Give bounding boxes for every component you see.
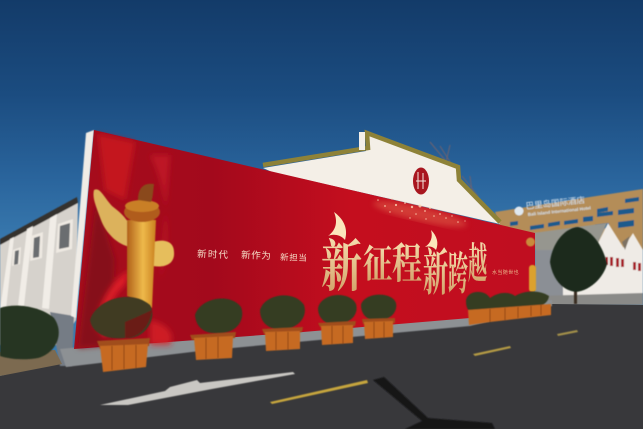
flames (328, 212, 346, 240)
beast (138, 184, 154, 202)
small gold emblem and figure (526, 238, 536, 292)
gold sparkle cloud (372, 196, 468, 232)
headline: 程 (392, 240, 422, 287)
white wall edge (71, 130, 94, 318)
shaft (127, 220, 156, 308)
curtain drapes (78, 134, 172, 348)
planter: second (190, 298, 242, 360)
shadow on road (373, 377, 495, 429)
tree: right of banner (550, 227, 607, 304)
windows (12, 219, 73, 266)
planter: left (90, 297, 152, 372)
hedge: bottom left (0, 306, 59, 359)
hotel building (495, 189, 643, 250)
right wing (153, 241, 174, 266)
hotel sign (514, 195, 591, 217)
headline: 征 (363, 243, 392, 286)
planter row: right (466, 292, 551, 325)
grey base under banner (60, 300, 552, 367)
slogan: 新时代 (197, 248, 229, 261)
pilasters (0, 214, 57, 310)
headline: 跨 (448, 249, 468, 299)
planter: third (260, 295, 305, 351)
slogan (197, 248, 308, 263)
planter: fourth (318, 295, 357, 345)
slogan: 新担当 (280, 252, 308, 263)
gable trim (263, 133, 500, 222)
headline: 新 (321, 236, 362, 299)
ground patch under hedge (0, 350, 62, 376)
road (0, 304, 643, 429)
headline (321, 212, 487, 301)
bare tree behind gable (430, 142, 478, 196)
cap (124, 202, 160, 222)
road markings (100, 330, 578, 405)
gable building behind banner (263, 132, 500, 224)
planter: fifth (361, 295, 396, 339)
left wing (93, 189, 133, 247)
headline: 越 (468, 241, 487, 288)
logo (413, 168, 429, 194)
slogan: 新作为 (241, 249, 272, 262)
white building left of banner (0, 197, 78, 366)
hotel sign: Bali Island International Hotel (528, 205, 591, 217)
headline: 新 (423, 246, 448, 301)
gable wall (263, 134, 500, 224)
red banner (74, 130, 536, 349)
low white building with sawtooth gables (533, 223, 643, 305)
hotel sign: 巴里岛国际酒店 (525, 195, 586, 211)
small caption: 水当随世也 (492, 269, 519, 276)
huabiao column (93, 184, 174, 308)
